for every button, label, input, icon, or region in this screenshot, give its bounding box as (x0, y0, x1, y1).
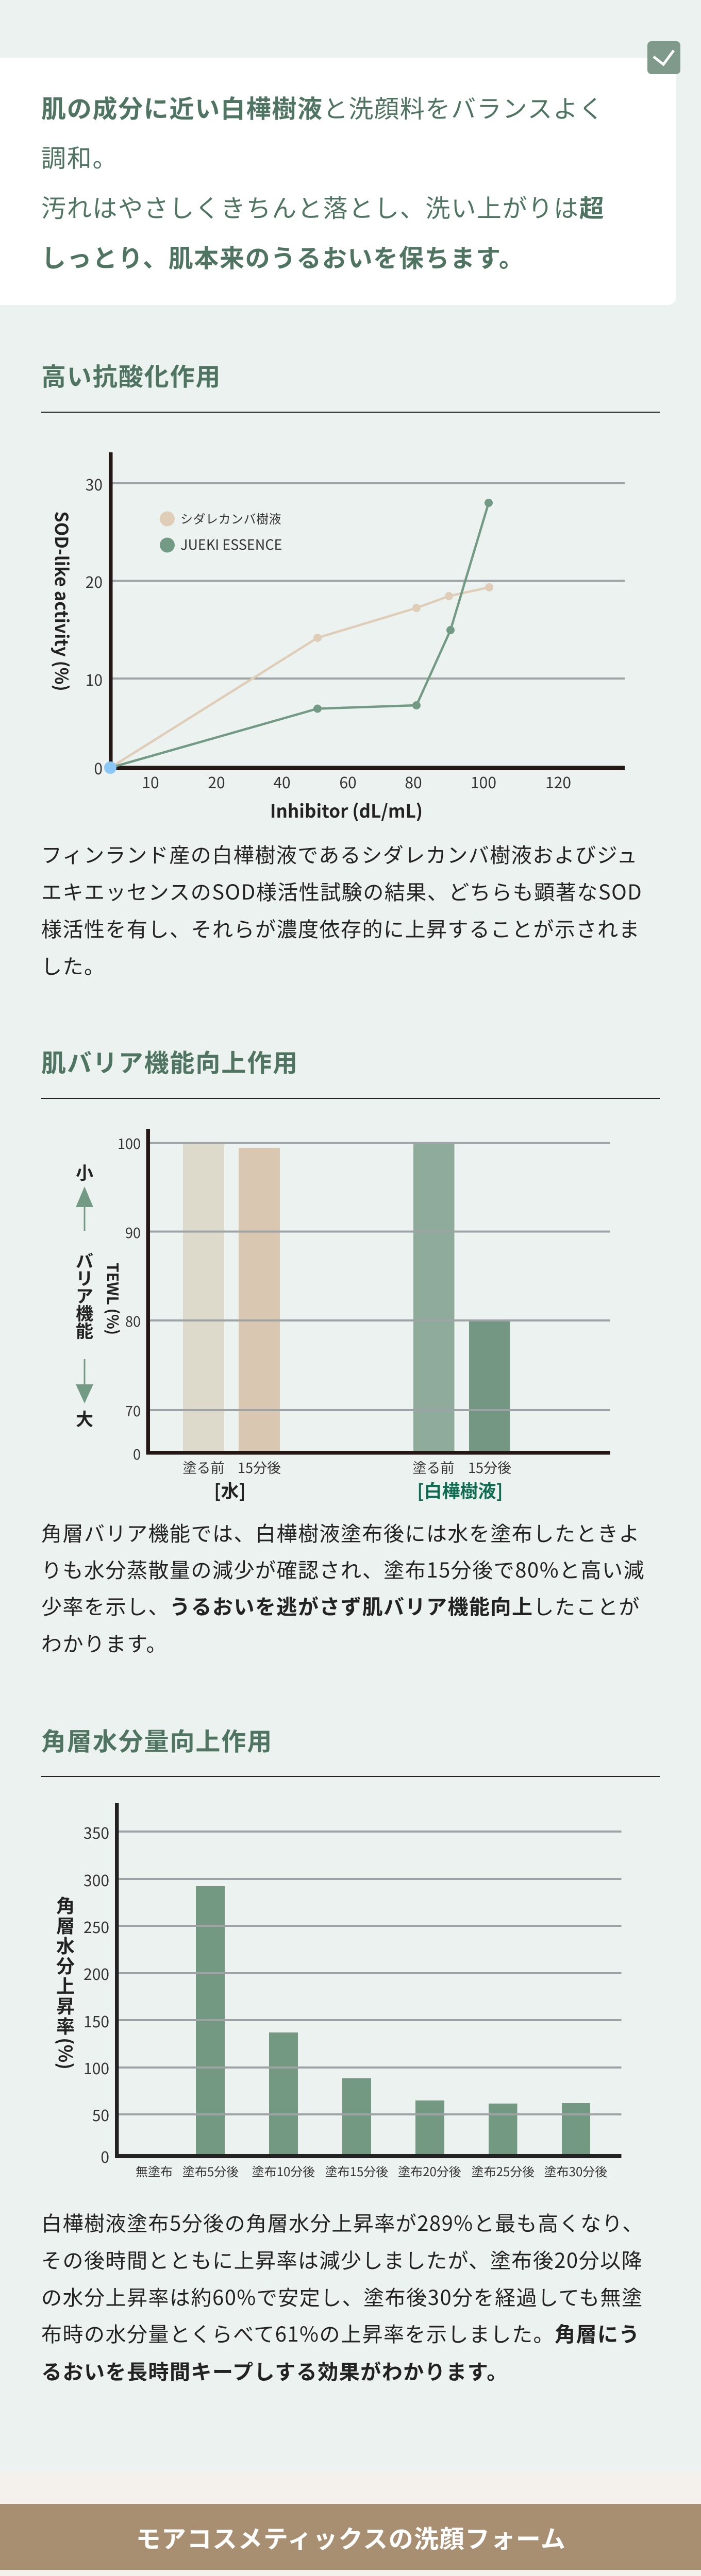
axis title: y: 上 (56, 1972, 75, 1998)
legend: シダレカンバ樹液 (180, 509, 281, 527)
axis scale: barrier function: 大 (76, 1405, 93, 1431)
line chart: SOD activity: 60 (339, 770, 357, 793)
axis title: TEWL: TEWL (%) (103, 1263, 125, 1335)
axis title: y: 分 (56, 1952, 75, 1978)
panel: intro callout (0, 41, 680, 305)
bar chart: TEWL (76, 1129, 610, 1503)
line chart: SOD activity: 80 (405, 770, 422, 793)
axis scale: barrier function (76, 1159, 93, 1431)
bar chart: TEWL: 100 (118, 1133, 141, 1153)
axis title: y: 層 (56, 1911, 75, 1938)
axis scale: barrier function: 能 (76, 1317, 93, 1343)
icon: check mark (647, 41, 680, 74)
intro text: 肌の成分に近い白樺樹液と洗顔料をバランスよく (41, 89, 604, 125)
axis title: x: Inhibitor (dL/mL) (270, 797, 423, 823)
bar chart: moisture increase: 塗布10分後 (252, 2162, 315, 2180)
text: moisture description: 布時の水分量とくらべて61%の上昇率を示しました。角層にう (41, 2318, 640, 2348)
heading rule (41, 1098, 660, 1099)
intro text (41, 89, 605, 274)
bar chart: moisture increase: 塗布15分後 (325, 2162, 388, 2180)
text: antioxidant description: 様活性を有し、それらが濃度依存的に上昇することが示されま (41, 913, 640, 943)
heading: skin barrier: 肌バリア機能向上作用 (41, 1043, 298, 1079)
line chart: SOD activity: 20 (208, 770, 225, 793)
bar chart: moisture increase: 塗布25分後 (472, 2162, 535, 2180)
series: シダレカンバ樹液 (110, 583, 493, 768)
bar chart: moisture increase: 塗布5分後 (182, 2162, 239, 2180)
line chart: SOD activity: 0 (94, 756, 103, 779)
origin dot (104, 761, 116, 774)
bar chart: moisture increase: 250 (84, 1915, 109, 1938)
text: moisture description: その後時間とともに上昇率は減少しましたが、塗布後20分以降 (41, 2244, 643, 2274)
section: antioxidant (41, 357, 660, 980)
axis title: y: 角 (56, 1891, 75, 1918)
bar chart: moisture increase: 塗布30分後 (544, 2162, 607, 2180)
axis scale: barrier function: バ (76, 1247, 93, 1273)
line chart: SOD activity: 20 (86, 570, 103, 592)
group label: water: [水] (214, 1477, 246, 1503)
line chart: SOD activity: 120 (545, 770, 571, 793)
legend: JUEKI ESSENCE (180, 534, 282, 554)
line chart: SOD activity: 100 (471, 770, 496, 793)
heading: antioxidant: 高い抗酸化作用 (41, 357, 221, 393)
bars (183, 1143, 510, 1451)
bars (196, 1886, 590, 2154)
legend (160, 509, 282, 554)
bar chart: moisture increase: 塗布20分後 (398, 2162, 461, 2180)
axis scale: barrier function: 機 (76, 1300, 93, 1325)
axis title: y: 水 (56, 1931, 75, 1958)
section: stratum corneum moisture (41, 1721, 660, 2385)
axis title: y: SOD-like activity (%) (50, 511, 76, 691)
bar chart: moisture increase: 200 (84, 1962, 109, 1985)
bar chart: TEWL: 15分後 (468, 1457, 511, 1477)
line chart: SOD activity (50, 452, 625, 823)
line chart: SOD activity: 10 (142, 770, 159, 793)
line chart: SOD activity: 30 (86, 472, 103, 495)
bar chart: moisture increase (53, 1803, 622, 2180)
arrow: up (76, 1187, 93, 1231)
banner: face wash section title (0, 2504, 701, 2570)
bar chart: TEWL: 15分後 (238, 1457, 281, 1477)
group label: birch sap: [白樺樹液] (417, 1477, 503, 1503)
text: antioxidant description: した。 (41, 950, 105, 980)
bar chart: TEWL: 塗る前 (182, 1457, 225, 1477)
axis title: y (53, 1891, 80, 2070)
bar chart: moisture increase: 350 (84, 1821, 109, 1843)
text: barrier description (41, 1517, 645, 1657)
text: antioxidant description (41, 839, 642, 980)
line chart: SOD activity: 40 (273, 770, 291, 793)
arrow: down (76, 1359, 93, 1403)
axis scale: barrier function: ア (76, 1282, 93, 1308)
text: moisture description (41, 2207, 644, 2385)
text: antioxidant description: エキエッセンスのSOD様活性試験の結果、どちらも顕著なSOD (41, 876, 642, 906)
bar chart: TEWL: 90 (125, 1222, 141, 1242)
intro text: 汚れはやさしくきちんと落とし、洗い上がりは超 (41, 188, 605, 224)
heading: moisture: 角層水分量向上作用 (41, 1721, 273, 1757)
heading rule (41, 412, 660, 413)
bar chart: moisture increase: 0 (101, 2145, 109, 2167)
axis scale: barrier function: 小 (76, 1159, 93, 1184)
heading rule (41, 1776, 660, 1777)
bar chart: TEWL: 塗る前 (412, 1457, 455, 1477)
text: barrier description: わかります。 (41, 1628, 168, 1657)
bar chart: TEWL: 70 (125, 1400, 141, 1420)
bar chart: moisture increase: 無塗布 (136, 2162, 173, 2180)
section: skin barrier (41, 1043, 660, 1657)
text: barrier description: 角層バリア機能では、白樺樹液塗布後には水を塗布したときよ (41, 1517, 640, 1547)
bar chart: TEWL: 80 (125, 1311, 141, 1331)
text: moisture description: の水分上昇率は約60%で安定し、塗布後30分を経過しても無塗 (41, 2281, 643, 2311)
axis title: y: 昇 (56, 1992, 75, 2019)
background: lower section (0, 2472, 701, 2576)
intro text: しっとり、肌本来のうるおいを保ちます。 (41, 238, 525, 274)
banner: face wash section title: モアコスメティックスの洗顔フォーム (136, 2519, 566, 2555)
bar chart: moisture increase: 50 (92, 2103, 109, 2126)
text: barrier description: 少率を示し、うるおいを逃がさず肌バリア機能向上したことが (41, 1590, 640, 1620)
bar chart: moisture increase: 150 (84, 2009, 109, 2032)
text: antioxidant description: フィンランド産の白樺樹液であるシダレカンバ樹液およびジュ (41, 839, 638, 869)
bar chart: moisture increase: 300 (84, 1868, 109, 1891)
line chart: SOD activity: 10 (86, 668, 103, 690)
intro text: 調和。 (41, 138, 118, 174)
bar chart: TEWL: 0 (133, 1444, 141, 1464)
text: barrier description: りも水分蒸散量の減少が確認され、塗布15分後で80%と高い減 (41, 1554, 645, 1584)
axis scale: barrier function: リ (76, 1265, 93, 1290)
axis title: y: (%) (53, 2038, 80, 2070)
text: moisture description: るおいを長時間キープしする効果がわかります。 (41, 2355, 508, 2385)
bar chart: moisture increase: 100 (84, 2056, 109, 2079)
series: JUEKI ESSENCE (110, 499, 493, 768)
text: moisture description: 白樺樹液塗布5分後の角層水分上昇率が289%と最も高くなり、 (41, 2207, 644, 2237)
axis title: y: 率 (56, 2012, 75, 2039)
panel background (0, 58, 676, 305)
